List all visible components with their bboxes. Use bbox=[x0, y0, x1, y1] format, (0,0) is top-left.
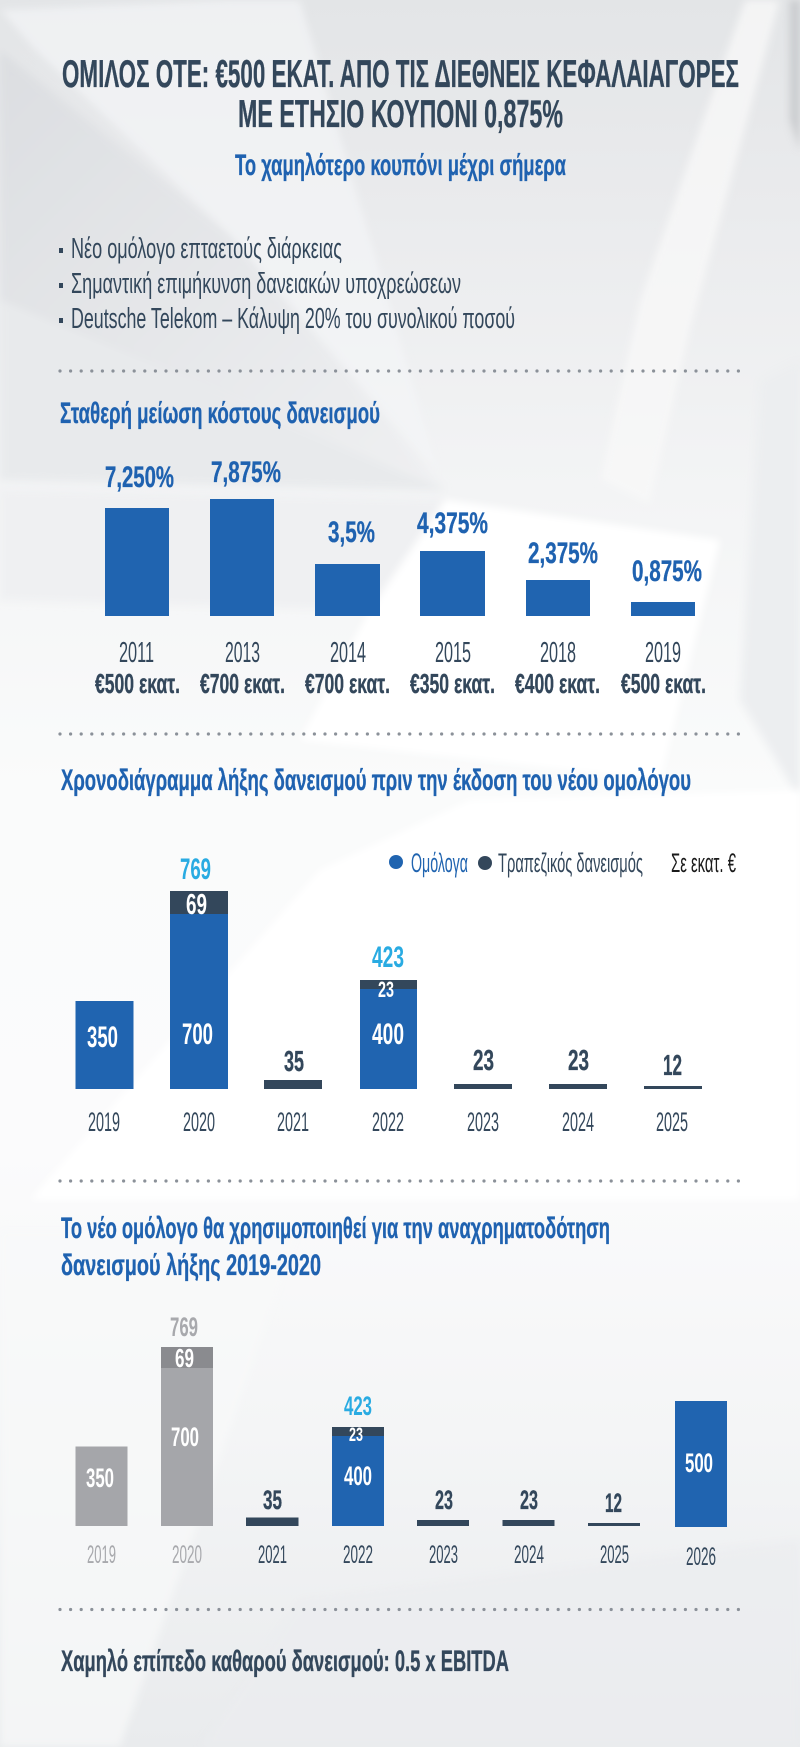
stacked bar chart: maturity timeline: 12 bbox=[663, 1050, 682, 1082]
title bbox=[62, 53, 739, 136]
stacked bar chart: maturity timeline: 69 bbox=[186, 889, 207, 921]
stacked bar chart: after new bond: 700 bbox=[171, 1422, 199, 1452]
stacked bar chart: after new bond bbox=[76, 1312, 727, 1571]
bar chart: borrowing cost: €500 εκατ. bbox=[95, 668, 180, 699]
bullet list bbox=[59, 233, 515, 335]
stacked bar chart: maturity timeline: 2019 bbox=[88, 1107, 120, 1137]
stacked bar chart: after new bond: 423 bbox=[344, 1391, 372, 1421]
stacked bar chart: maturity timeline: 400 bbox=[372, 1018, 404, 1051]
stacked bar chart: after new bond: 12 bbox=[605, 1488, 622, 1518]
stacked bar chart: after new bond: 23 bbox=[349, 1425, 363, 1446]
stacked bar chart: maturity timeline: 2021 bbox=[277, 1107, 309, 1137]
stacked bar chart: maturity timeline: 23 bbox=[568, 1045, 589, 1077]
stacked bar chart: after new bond: 23 bbox=[520, 1485, 538, 1515]
stacked bar chart: maturity timeline: 2025 bbox=[656, 1107, 688, 1137]
bar chart: borrowing cost: €350 εκατ. bbox=[410, 668, 495, 699]
legend: Τραπεζικός δανεισμός bbox=[498, 848, 643, 878]
stacked bar chart: maturity timeline: 700 bbox=[182, 1018, 213, 1051]
stacked bar chart: after new bond: 2022 bbox=[343, 1541, 373, 1569]
stacked bar chart: after new bond: 2019 bbox=[87, 1541, 116, 1569]
heading: refinancing: δανεισμού λήξης 2019-2020 bbox=[61, 1249, 321, 1282]
stacked bar chart: after new bond: 69 bbox=[175, 1343, 194, 1373]
heading: refinancing bbox=[61, 1212, 610, 1282]
stacked bar chart: after new bond: 2025 bbox=[600, 1541, 629, 1569]
bar chart: borrowing cost: 2019 bbox=[645, 637, 681, 669]
bar chart: borrowing cost: 2013 bbox=[225, 637, 260, 669]
stacked bar chart: maturity timeline: 769 bbox=[180, 853, 211, 886]
stacked bar chart: maturity timeline: 2024 bbox=[562, 1107, 594, 1137]
bullet list: Νέο ομόλογο επταετούς διάρκειας bbox=[71, 233, 342, 265]
title: ΜΕ ΕΤΗΣΙΟ ΚΟΥΠΟΝΙ 0,875% bbox=[238, 93, 563, 136]
bar chart: borrowing cost: 2011 bbox=[119, 637, 154, 669]
bar chart: borrowing cost: 2,375% bbox=[528, 537, 598, 570]
legend: Σε εκατ. € bbox=[671, 848, 736, 878]
stacked bar chart: after new bond: 2026 bbox=[686, 1543, 716, 1571]
stacked bar chart: maturity timeline: 23 bbox=[378, 977, 394, 1002]
bar chart: borrowing cost: €700 εκατ. bbox=[305, 668, 390, 699]
legend bbox=[389, 848, 736, 878]
stacked bar chart: maturity timeline: 2020 bbox=[183, 1107, 215, 1137]
stacked bar chart: after new bond: 500 bbox=[685, 1448, 713, 1478]
stacked bar chart: after new bond: 2024 bbox=[514, 1541, 544, 1569]
bar chart: borrowing cost: 4,375% bbox=[417, 507, 488, 540]
stacked bar chart: maturity timeline: 350 bbox=[87, 1021, 118, 1054]
stacked bar chart: after new bond: 2023 bbox=[429, 1541, 458, 1569]
bar chart: borrowing cost: 7,250% bbox=[105, 461, 174, 494]
heading: borrowing cost: Σταθερή μείωση κόστους δανεισμού bbox=[60, 397, 380, 430]
bar chart: borrowing cost: 0,875% bbox=[632, 555, 702, 588]
stacked bar chart: after new bond: 769 bbox=[170, 1312, 198, 1342]
stacked bar chart: after new bond: 35 bbox=[263, 1485, 282, 1515]
closing statement: Χαμηλό επίπεδο καθαρού δανεισμού: 0.5 x EBITDA bbox=[61, 1645, 509, 1678]
stacked bar chart: after new bond: 23 bbox=[435, 1485, 453, 1515]
bar chart: borrowing cost: 2018 bbox=[540, 637, 576, 669]
stacked bar chart: maturity timeline: 2023 bbox=[467, 1107, 499, 1137]
bar chart: borrowing cost: 2014 bbox=[330, 637, 366, 669]
bar chart: borrowing cost: €700 εκατ. bbox=[200, 668, 285, 699]
bar chart: borrowing cost: 7,875% bbox=[211, 456, 281, 489]
stacked bar chart: after new bond: 2021 bbox=[258, 1541, 287, 1569]
stacked bar chart: after new bond: 2020 bbox=[172, 1541, 202, 1569]
bar chart: borrowing cost: €400 εκατ. bbox=[515, 668, 600, 699]
stacked bar chart: maturity timeline: 2022 bbox=[372, 1107, 404, 1137]
stacked bar chart: after new bond: 350 bbox=[86, 1463, 114, 1493]
bar chart: borrowing cost: €500 εκατ. bbox=[621, 668, 706, 699]
stacked bar chart: maturity timeline: 423 bbox=[372, 941, 404, 974]
bullet list: Σημαντική επιμήκυνση δανειακών υποχρεώσεων bbox=[71, 268, 461, 300]
bullet list: Deutsche Telekom – Κάλυψη 20% του συνολικού ποσού bbox=[71, 303, 515, 335]
bar chart: borrowing cost: 3,5% bbox=[328, 516, 375, 549]
bar chart: borrowing cost: 2015 bbox=[435, 637, 471, 669]
stacked bar chart: maturity timeline: 23 bbox=[473, 1045, 494, 1077]
legend: Ομόλογα bbox=[411, 848, 468, 878]
stacked bar chart: maturity timeline: 35 bbox=[284, 1046, 304, 1078]
bar chart: borrowing cost bbox=[95, 456, 706, 699]
stacked bar chart: maturity timeline bbox=[76, 853, 702, 1137]
stacked bar chart: after new bond: 400 bbox=[344, 1461, 372, 1491]
subtitle: Το χαμηλότερο κουπόνι μέχρι σήμερα bbox=[235, 149, 566, 182]
